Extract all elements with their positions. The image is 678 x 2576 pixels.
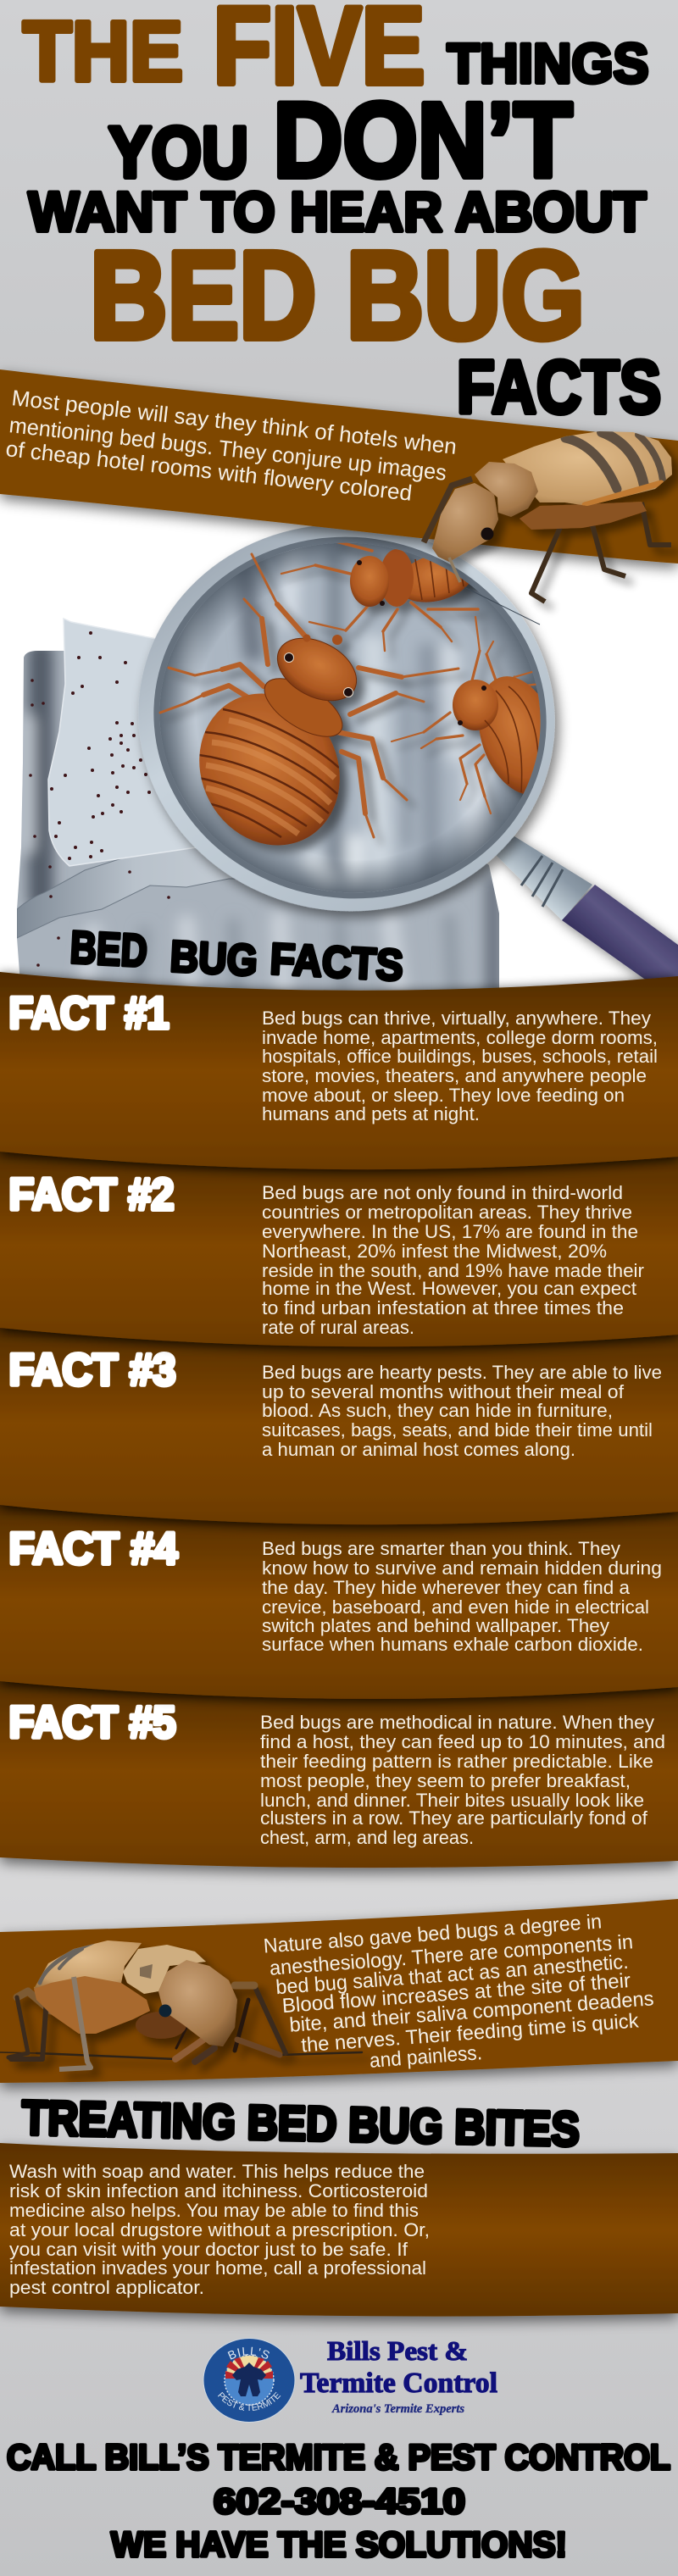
- text: fact 2: Bed bugs are not only found in third-world: [262, 1182, 623, 1203]
- text: fact 5: chest, arm, and leg areas.: [260, 1827, 474, 1848]
- company name: [300, 2335, 497, 2416]
- text: fact 3: a human or animal host comes along.: [262, 1439, 575, 1460]
- treating text: [9, 2161, 430, 2298]
- text: fact 2: Northeast, 20% infest the Midwest, 20%: [262, 1241, 607, 1262]
- text: fact 2: [262, 1182, 644, 1338]
- magnifier lens groove: [131, 512, 570, 924]
- text: fact 1: Bed bugs can thrive, virtually, anywhere. They: [262, 1008, 651, 1029]
- anesthesia text: Blood flow increases at the site of their: [281, 1969, 631, 2018]
- treating text: at your local drugstore without a prescription. Or,: [9, 2219, 430, 2240]
- treating text: infestation invades your home, call a professional: [9, 2257, 426, 2279]
- text: fact 5: find a host, they can feed up to 10 minutes, and: [260, 1731, 665, 1752]
- magnifier lens rim: [114, 497, 580, 938]
- logo badge: [203, 2338, 295, 2423]
- text: fact 1: hospitals, office buildings, buses, schools, retail: [262, 1046, 658, 1067]
- anesthesia banner: [0, 1899, 678, 2083]
- magnifier lens interior: [159, 542, 541, 893]
- title: YOU: [108, 113, 248, 193]
- magnifier handle: [493, 836, 678, 987]
- intro text: of cheap hotel rooms with flowery colored: [4, 436, 414, 506]
- lens inner vignette: [159, 542, 541, 893]
- text: fact 1: humans and pets at night.: [262, 1103, 480, 1124]
- company name: Arizona's Termite Experts: [331, 2402, 464, 2416]
- heading: fact 2: FACT #2: [8, 1169, 175, 1220]
- text: fact 4: the day. They hide wherever they can find a: [262, 1577, 631, 1598]
- text: fact 5: Bed bugs are methodical in nature. When they: [260, 1712, 654, 1733]
- treating text: medicine also helps. You may be able to find this: [9, 2200, 419, 2221]
- bug: top: [281, 541, 479, 651]
- heading: fact 1: FACT #1: [8, 988, 170, 1039]
- text: fact 2: rate of rural areas.: [262, 1317, 414, 1338]
- label: bed bug facts: FACTS: [269, 935, 404, 991]
- anesthesia text: bed bug saliva that act as an anesthetic.: [275, 1951, 629, 1999]
- text: fact 1: invade home, apartments, college dorm rooms,: [262, 1027, 658, 1048]
- company name: Bills Pest &: [327, 2335, 468, 2366]
- text: fact 2: countries or metropolitan areas. They thrive: [262, 1202, 632, 1223]
- intro text: mentioning bed bugs. They conjure up images: [8, 412, 447, 486]
- text: fact 3: suitcases, bags, seats, and bide their time until: [262, 1419, 653, 1441]
- blanket fold: [17, 846, 356, 938]
- text: fact 4: know how to survive and remain hidden during: [262, 1557, 662, 1579]
- bug: main large: [160, 554, 458, 870]
- blood spots: [29, 631, 170, 967]
- text: fact 2: reside in the south, and 19% have made their: [262, 1260, 644, 1281]
- crack line on lens: [464, 587, 540, 625]
- treating text: pest control applicator.: [9, 2277, 204, 2298]
- text: fact 5: most people, they seem to prefer breakfast,: [260, 1770, 631, 1791]
- bed sheet: [0, 644, 508, 1000]
- text: fact 5: clusters in a row. They are particularly fond of: [260, 1807, 648, 1829]
- anesthesia text: anesthesiology. There are components in: [269, 1930, 634, 1980]
- text: fact 1: store, movies, theaters, and anywhere people: [262, 1065, 647, 1086]
- intro banner: [0, 369, 678, 602]
- section: fact 1: [0, 972, 678, 1169]
- title: THE: [23, 4, 183, 99]
- pillow: [48, 619, 197, 866]
- section: fact 3: [0, 1322, 678, 1524]
- logo badge: BILL'S: [227, 2347, 270, 2360]
- section: fact 2: [0, 1144, 678, 1346]
- text: fact 3: [262, 1362, 662, 1460]
- label: bed bug facts: BED: [69, 922, 148, 977]
- anesthesia text: [263, 1910, 654, 2073]
- background: upper grey: [0, 0, 678, 508]
- treating text: risk of skin infection and itchiness. Corticosteroid: [9, 2180, 428, 2201]
- icon: tan bed bug side view: [0, 1940, 362, 2069]
- facts panel: [0, 972, 678, 1868]
- background: lower grey: [0, 1856, 678, 2576]
- text: fact 1: move about, or sleep. They love feeding on: [262, 1085, 625, 1106]
- text: fact 2: home in the West. However, you can expect: [262, 1278, 636, 1299]
- logo: bills pest and termite control: [203, 2335, 497, 2423]
- heading: fact 4: FACT #4: [8, 1524, 178, 1574]
- text: fact 4: [262, 1538, 662, 1655]
- heading: treating bed bug bites: TREATING BED BUG BITES: [21, 2091, 580, 2157]
- text: fact 2: everywhere. In the US, 17% are found in the: [262, 1221, 638, 1242]
- company name: Termite Control: [300, 2368, 497, 2399]
- text: fact 4: switch plates and behind wallpaper. They: [262, 1615, 609, 1636]
- text: fact 3: blood. As such, they can hide in furniture,: [262, 1400, 613, 1421]
- call to action: WE HAVE THE SOLUTIONS!: [111, 2524, 567, 2564]
- text: fact 5: [260, 1712, 665, 1848]
- treating text: Wash with soap and water. This helps reduce the: [9, 2161, 425, 2182]
- treating panel: [0, 2143, 678, 2317]
- label: bed bug facts: [69, 922, 404, 991]
- intro text: Most people will say they think of hotels when: [10, 385, 458, 459]
- logo badge: PEST & TERMITE: [218, 2391, 281, 2411]
- banner shape: [0, 1899, 678, 2083]
- title: BED BUG: [90, 226, 585, 365]
- title: WANT TO HEAR ABOUT: [29, 181, 646, 242]
- text: fact 5: their feeding pattern is rather predictable. Like: [260, 1751, 653, 1772]
- sheet folds seen through lens: [188, 542, 479, 898]
- banner shape: [0, 369, 678, 564]
- panel shape: [0, 2143, 678, 2317]
- text: fact 4: crevice, baseboard, and even hide in electrical: [262, 1596, 649, 1618]
- anesthesia text: and painless.: [369, 2041, 483, 2073]
- title: THINGS: [447, 32, 649, 95]
- background: white image section: [0, 483, 678, 1000]
- text: fact 3: Bed bugs are hearty pests. They are able to live: [262, 1362, 662, 1383]
- heading: fact 3: FACT #3: [8, 1346, 176, 1395]
- title: [23, 0, 661, 429]
- anesthesia text: bite, and their saliva component deadens: [289, 1987, 654, 2037]
- call to action: 602-308-4510: [214, 2481, 465, 2521]
- call to action: [7, 2437, 670, 2564]
- text: fact 4: surface when humans exhale carbon dioxide.: [262, 1634, 643, 1655]
- text: fact 3: up to several months without their meal of: [262, 1381, 625, 1402]
- treating text: you can visit with your doctor just to be safe. If: [9, 2239, 408, 2260]
- text: fact 2: to find urban infestation at three times the: [262, 1297, 624, 1319]
- title: DON’T: [273, 80, 573, 200]
- illustration: bed, pillow and magnifying glass with bed bugs: [0, 497, 678, 1000]
- text: fact 1: [262, 1008, 658, 1124]
- icon: large tan bed bug: [424, 431, 672, 602]
- label: bed bug facts: BUG: [169, 932, 258, 985]
- section: fact 5: [0, 1674, 678, 1868]
- text: fact 5: lunch, and dinner. Their bites usually look like: [260, 1790, 644, 1811]
- bug: right: [390, 615, 541, 818]
- intro text: [4, 385, 458, 506]
- anesthesia text: the nerves. Their feeding time is quick: [300, 2009, 640, 2057]
- section: fact 4: [0, 1500, 678, 1699]
- heading: fact 5: FACT #5: [8, 1698, 176, 1747]
- text: fact 4: Bed bugs are smarter than you think. They: [262, 1538, 620, 1559]
- anesthesia text: Nature also gave bed bugs a degree in: [263, 1910, 603, 1958]
